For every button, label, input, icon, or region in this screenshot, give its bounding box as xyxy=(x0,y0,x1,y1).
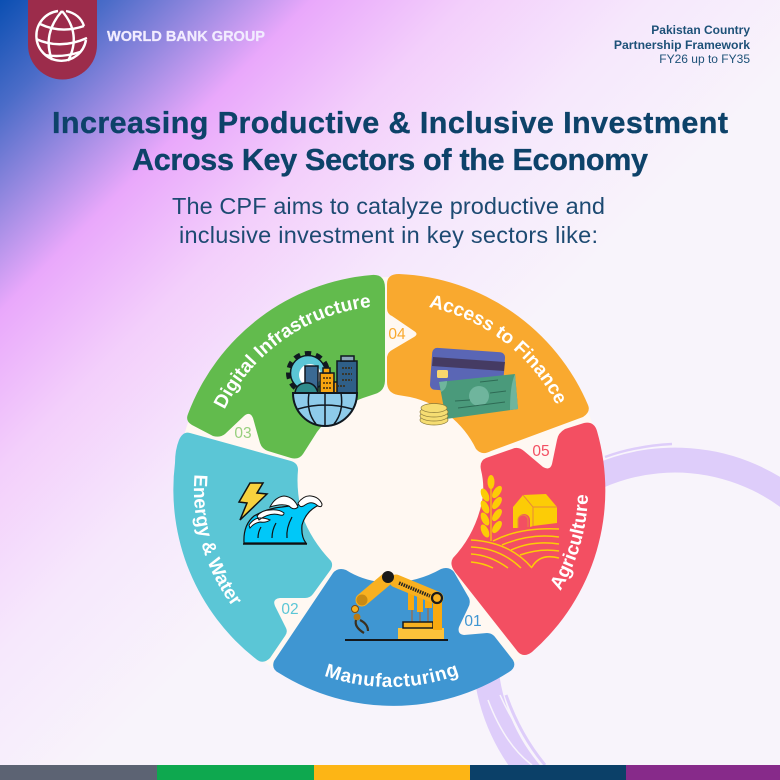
title: Across Key Sectors of the Economy xyxy=(132,143,648,177)
subtitle: inclusive investment in key sectors like: xyxy=(179,222,598,248)
number 01: 01 xyxy=(464,613,482,630)
title xyxy=(52,106,728,177)
number 05: 05 xyxy=(532,443,550,460)
segment: Energy & Water xyxy=(173,432,332,662)
number 04: 04 xyxy=(388,326,406,343)
subtitle xyxy=(172,193,605,248)
segment: Manufacturing xyxy=(273,568,514,706)
icon: robot arm xyxy=(345,571,448,640)
segment: Digital Infrastructure xyxy=(187,274,385,458)
sector wheel xyxy=(173,274,606,706)
segment: Digital Infrastructure: Digital Infrastructure xyxy=(214,297,370,409)
icon: lightning and wave xyxy=(239,483,322,544)
segment: Access to Finance: Access to Finance xyxy=(429,296,564,404)
segment: Access to Finance xyxy=(387,274,589,454)
footer colour bar xyxy=(0,765,780,780)
wordmark: WORLD BANK GROUP xyxy=(107,29,265,45)
header text: framework name: FY26 up to FY35 xyxy=(659,52,750,66)
segment: Agriculture: Agriculture xyxy=(552,495,588,591)
number 02: 02 xyxy=(281,601,299,618)
decorative brush ring xyxy=(473,444,780,765)
icon: smart city on globe xyxy=(289,354,357,426)
segment: Energy & Water: Energy & Water xyxy=(192,476,241,604)
icon: credit card, banknote and coins xyxy=(420,348,518,425)
logo crest with globe xyxy=(28,0,97,80)
header text: framework name: Partnership Framework xyxy=(614,38,750,52)
segment: Agriculture xyxy=(451,422,606,655)
header text: framework name: Pakistan Country xyxy=(651,23,750,37)
number 03: 03 xyxy=(234,425,252,442)
logo: World Bank Group xyxy=(28,0,265,80)
segment: Manufacturing: Manufacturing xyxy=(325,664,458,688)
title: Increasing Productive & Inclusive Investment xyxy=(52,106,728,140)
subtitle: The CPF aims to catalyze productive and xyxy=(172,193,605,219)
header text: framework name xyxy=(614,23,750,66)
icon: wheat, farmhouse and fields xyxy=(471,475,559,568)
